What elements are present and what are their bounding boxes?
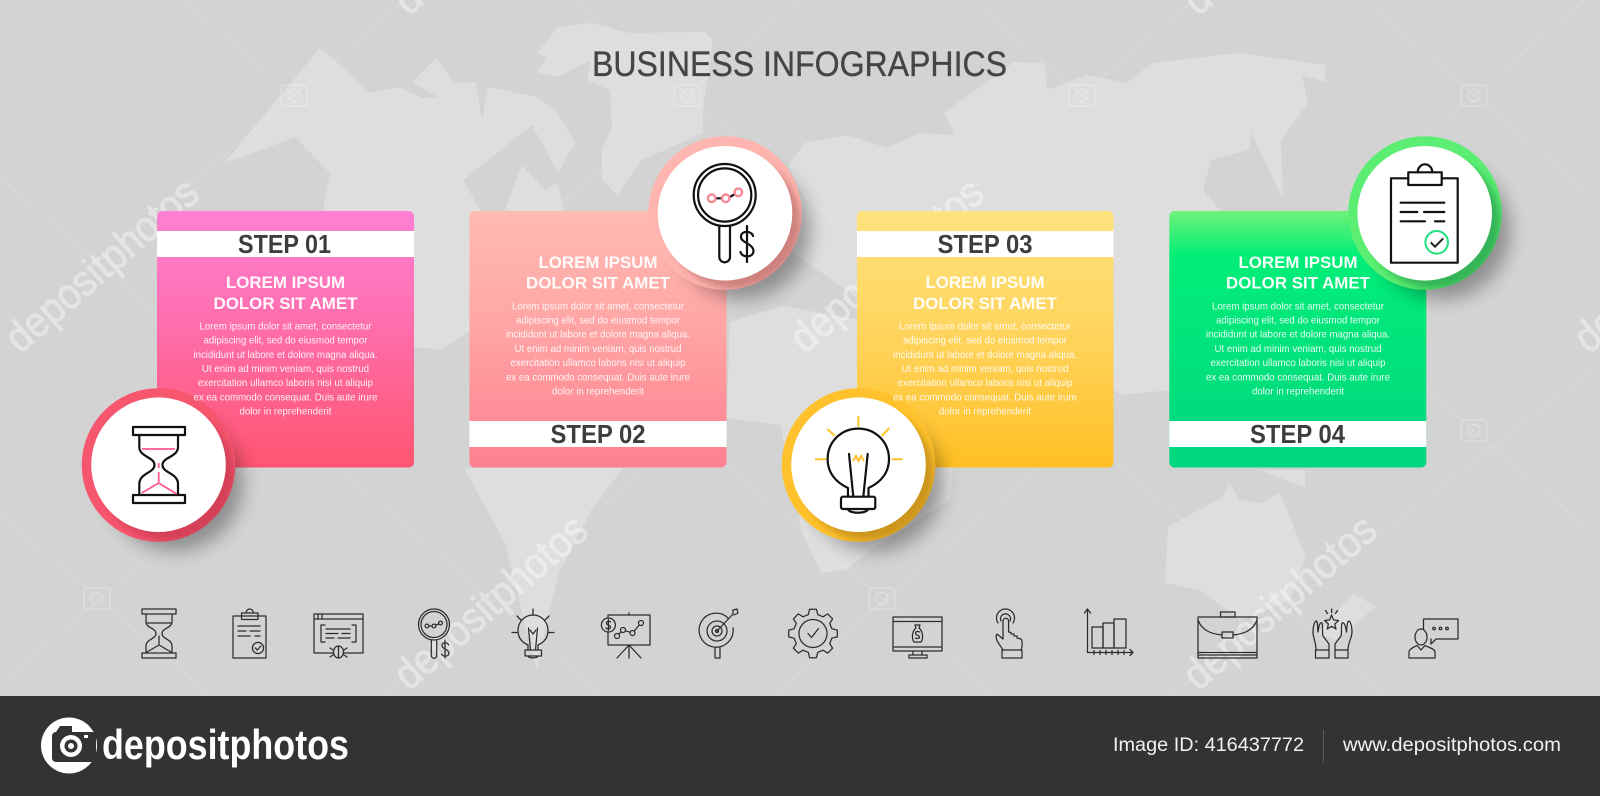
card background	[1169, 211, 1426, 468]
icon: bar chart small	[1084, 609, 1133, 656]
body text: exercitation ullamco laboris nisi ut aliquip	[510, 358, 686, 369]
body text	[893, 321, 1077, 418]
panel: step 03	[782, 211, 1114, 551]
body text	[506, 301, 690, 398]
icon: hands with star small	[1313, 609, 1352, 658]
icon: hourglass small	[142, 609, 176, 658]
icon: magnifier with dollar	[694, 164, 756, 262]
body text	[1206, 301, 1390, 398]
step band	[857, 229, 1114, 259]
heading: LOREM IPSUM	[226, 273, 345, 292]
heading: LOREM IPSUM	[1238, 253, 1358, 272]
heading: DOLOR SIT AMET	[214, 294, 358, 313]
panel: step 04	[1169, 136, 1510, 467]
step band: STEP 03	[938, 229, 1032, 259]
body text: exercitation ullamco laboris nisi ut aliquip	[1210, 358, 1386, 369]
heading	[913, 273, 1058, 313]
body text: Lorem ipsum dolor sit amet, consectetur	[1212, 301, 1385, 312]
icon: light bulb small	[512, 609, 554, 658]
panel: step 01	[82, 211, 414, 551]
icon: monitor small	[893, 617, 942, 658]
icon: clipboard small	[233, 609, 266, 658]
body text: adipiscing elit, sed do eiusmod tempor	[903, 336, 1068, 347]
body text: incididunt ut labore et dolore magna aliqua.	[893, 350, 1077, 361]
world map	[225, 23, 1376, 672]
logo wordmark: depositphotos	[102, 721, 349, 768]
body text: exercitation ullamco laboris nisi ut aliquip	[898, 378, 1073, 389]
body text: Lorem ipsum dolor sit amet, consectetur	[899, 321, 1072, 332]
heading: DOLOR SIT AMET	[526, 274, 671, 293]
heading	[526, 253, 671, 293]
body text: Ut enim ad minim veniam, quis nostrud	[1214, 344, 1382, 355]
body text: incididunt ut labore et dolore magna aliqua.	[194, 350, 378, 361]
step band	[1169, 419, 1426, 449]
footer bar	[0, 696, 1600, 796]
watermark pattern: depositphotos	[385, 506, 597, 699]
title: BUSINESS INFOGRAPHICS	[592, 45, 1007, 84]
icon: pointing hand small	[996, 609, 1022, 658]
step band: STEP 01	[238, 229, 331, 259]
step band: STEP 04	[1250, 419, 1345, 449]
icon: magnifier small	[418, 609, 450, 658]
circle badge	[782, 388, 943, 551]
watermark pattern: depositphotos	[1174, 506, 1386, 699]
icon row	[142, 609, 1458, 658]
icon: presentation small	[601, 613, 650, 658]
body text: adipiscing elit, sed do eiusmod tempor	[204, 336, 368, 347]
body text: ex ea commodo consequat. Duis aute irure	[1206, 372, 1390, 383]
body text: ex ea commodo consequat. Duis aute irure	[893, 392, 1077, 403]
circle badge	[1348, 136, 1510, 299]
step band	[157, 229, 414, 259]
icon: gear small	[789, 609, 837, 658]
body text: dolor in reprehenderit	[939, 407, 1031, 418]
icon: light bulb	[815, 416, 903, 513]
body text: ex ea commodo consequat. Duis aute irure	[194, 392, 378, 403]
card background	[157, 211, 414, 468]
body text: adipiscing elit, sed do eiusmod tempor	[1216, 316, 1381, 326]
card background	[470, 211, 726, 468]
heading	[1226, 253, 1371, 293]
icon: hourglass	[133, 427, 185, 503]
icon: person with speech bubble small	[1409, 619, 1458, 658]
card background	[857, 211, 1114, 468]
icon: briefcase small	[1198, 612, 1257, 658]
logo icon: camera	[41, 718, 97, 774]
website: www.depositphotos.com	[1342, 734, 1561, 756]
step band: STEP 02	[550, 419, 646, 449]
body text: dolor in reprehenderit	[240, 407, 332, 418]
body text: Lorem ipsum dolor sit amet, consectetur	[512, 301, 685, 312]
body text	[194, 321, 378, 418]
watermark pattern: depositphotos	[0, 169, 208, 362]
body text: exercitation ullamco laboris nisi ut aliquip	[198, 378, 373, 389]
body text: incididunt ut labore et dolore magna aliqua.	[506, 330, 690, 341]
heading: DOLOR SIT AMET	[1226, 274, 1371, 293]
body text: Ut enim ad minim veniam, quis nostrud	[902, 364, 1069, 375]
icon: certificate small	[314, 614, 363, 658]
body text: dolor in reprehenderit	[1252, 387, 1344, 398]
body text: Ut enim ad minim veniam, quis nostrud	[202, 364, 369, 375]
body text: dolor in reprehenderit	[552, 387, 644, 398]
heading	[214, 273, 358, 313]
image id: Image ID: 416437772	[1113, 734, 1304, 756]
heading: DOLOR SIT AMET	[913, 294, 1058, 313]
icon: clipboard	[1391, 164, 1458, 263]
body text: ex ea commodo consequat. Duis aute irure	[506, 372, 690, 383]
body text: Lorem ipsum dolor sit amet, consectetur	[200, 321, 372, 332]
body text: Ut enim ad minim veniam, quis nostrud	[514, 344, 682, 355]
icon: target small	[699, 609, 738, 658]
heading: LOREM IPSUM	[538, 253, 658, 272]
panel: step 02	[470, 136, 810, 467]
body text: incididunt ut labore et dolore magna aliqua.	[1206, 330, 1390, 341]
body text: adipiscing elit, sed do eiusmod tempor	[516, 316, 681, 326]
heading: LOREM IPSUM	[926, 273, 1044, 292]
circle badge	[648, 136, 810, 299]
step band	[470, 419, 726, 449]
watermark pattern: depositphotos	[781, 169, 993, 362]
circle badge	[82, 388, 243, 551]
